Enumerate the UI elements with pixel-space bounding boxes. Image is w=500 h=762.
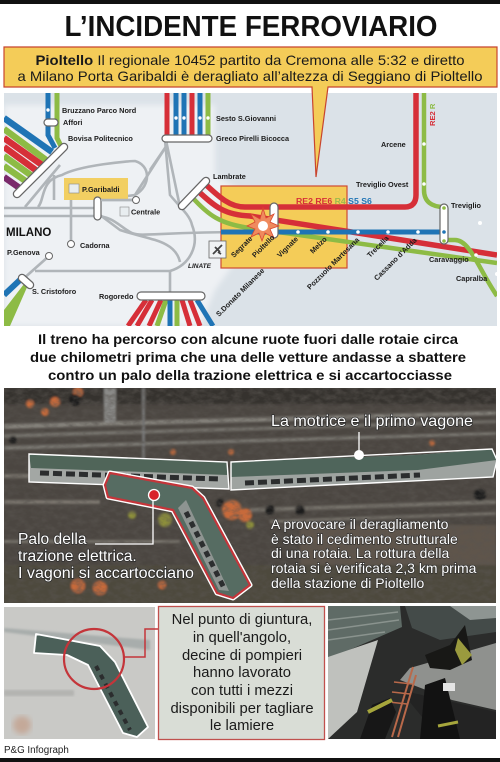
pointer: pole	[95, 490, 160, 544]
station labels: Sesto S.Giovanni	[216, 114, 276, 123]
subheading: contro un palo della trazione elettrica e si accartocciasse	[48, 367, 452, 383]
station labels: S. Cristoforo	[32, 287, 77, 296]
subheading	[30, 331, 466, 383]
highlighted area	[221, 186, 347, 268]
station labels: Capralba	[456, 274, 488, 283]
station pills	[17, 119, 448, 300]
carriage: rear wagon	[29, 454, 229, 489]
station labels: S.Donato Milanese	[214, 266, 266, 318]
Centrale station: Centrale	[131, 208, 160, 216]
Garibaldi label	[64, 178, 128, 200]
station labels: Vignate	[275, 234, 300, 259]
panel: text box: hanno lavorato	[193, 665, 291, 681]
station labels	[7, 103, 488, 318]
Garibaldi pill	[94, 197, 101, 220]
callout	[4, 47, 497, 177]
credit: P&G Infograph	[4, 745, 69, 756]
station labels: Arcene	[381, 140, 406, 149]
text: cause of derailment: della stazione di Pioltello	[271, 575, 425, 591]
Garibaldi label: P.Garibaldi	[82, 185, 120, 194]
panel: text box: con tutti i mezzi	[191, 683, 293, 699]
text: cause of derailment: è stato il cedimento strutturale	[271, 531, 458, 547]
panel: aerial photo	[4, 387, 500, 603]
line bundle: Sesto and Greco	[167, 93, 208, 136]
station labels: LINATE	[188, 263, 212, 270]
Cadorna and Genova stations	[46, 240, 74, 260]
panel: text box: in quell'angolo,	[193, 630, 291, 646]
station labels: Bruzzano Parco Nord	[62, 106, 136, 115]
highlight circle	[64, 629, 124, 689]
line names: RE2 RE6 R4 S5 S6	[296, 196, 372, 206]
station labels: Trecella	[365, 233, 391, 259]
text: cause of derailment: A provocare il deragliamento	[271, 516, 449, 532]
station labels: Segrate	[229, 234, 254, 259]
station labels: Melzo	[308, 234, 329, 255]
station stops	[46, 108, 499, 276]
pointer: first wagon	[354, 432, 364, 460]
panel: route map	[4, 93, 499, 326]
station labels: Cassano d'Adda	[372, 235, 419, 282]
carriage: crumpled wagons	[105, 473, 250, 598]
title: L’INCIDENTE FERROVIARIO	[64, 11, 438, 43]
station labels: Pozzuolo Martesana	[305, 235, 362, 291]
label: first wagon: La motrice e il primo vagone	[271, 413, 473, 430]
station labels: Greco Pirelli Bicocca	[216, 134, 290, 143]
station labels: RE2 R	[428, 103, 437, 126]
station labels: Bovisa Politecnico	[68, 134, 133, 143]
subheading: Il treno ha percorso con alcune ruote fuori dalle rotaie circa	[38, 331, 458, 347]
panel: text box: le lamiere	[210, 718, 274, 734]
station labels: Affori	[63, 118, 82, 127]
panel: text box: Nel punto di giuntura,	[172, 612, 312, 628]
station labels: Pioltello	[250, 233, 277, 259]
crumpled train	[34, 634, 148, 737]
line bundle: Rogoredo	[128, 300, 213, 326]
icon: crash burst	[247, 208, 279, 241]
city label: MILANO	[6, 227, 51, 239]
photo texture	[4, 387, 500, 603]
grey Milano network	[4, 142, 220, 292]
Centrale station	[101, 196, 160, 216]
subheading: due chilometri prima che una delle vetture andasse a sbattere	[30, 349, 466, 365]
label: pole: Palo della	[18, 531, 87, 548]
station labels: Treviglio Ovest	[356, 180, 409, 189]
station labels: Lambrate	[213, 172, 246, 181]
panel: text box: disponibili per tagliare	[170, 701, 314, 717]
panel: firefighters photo	[328, 606, 496, 739]
text: cause of derailment: rotaia si è verificata 2,3 km prima	[271, 560, 477, 576]
station labels: P.Genova	[7, 248, 41, 257]
line bundle: north-west	[4, 93, 62, 189]
panel: text box: decine di pompieri	[182, 648, 302, 664]
text: cause of derailment	[271, 516, 477, 591]
connector	[124, 629, 159, 657]
line bundle: Cristoforo	[4, 278, 28, 326]
station labels: Treviglio	[451, 201, 482, 210]
label: pole: I vagoni si accartocciano	[18, 565, 194, 582]
station labels: Rogoredo	[99, 292, 134, 301]
callout text	[18, 52, 483, 84]
label: pole: trazione elettrica.	[18, 548, 137, 565]
panel: text box	[158, 606, 324, 740]
railway lines	[192, 93, 497, 296]
station labels: Caravaggio	[429, 255, 469, 264]
carriages: engine and first wagon	[231, 449, 497, 490]
panel: detail photo	[4, 607, 155, 739]
callout text: a Milano Porta Garibaldi è deragliato all’altezza di Seggiano di Pioltello	[18, 68, 483, 84]
callout text: Pioltello Il regionale 10452 partito da Cremona alle 5:32 e diretto	[36, 52, 465, 68]
station labels: Cadorna	[80, 241, 111, 250]
icon: airport	[209, 241, 226, 258]
text: cause of derailment: di una rotaia. La rottura della	[271, 545, 449, 561]
label: pole	[18, 531, 194, 582]
